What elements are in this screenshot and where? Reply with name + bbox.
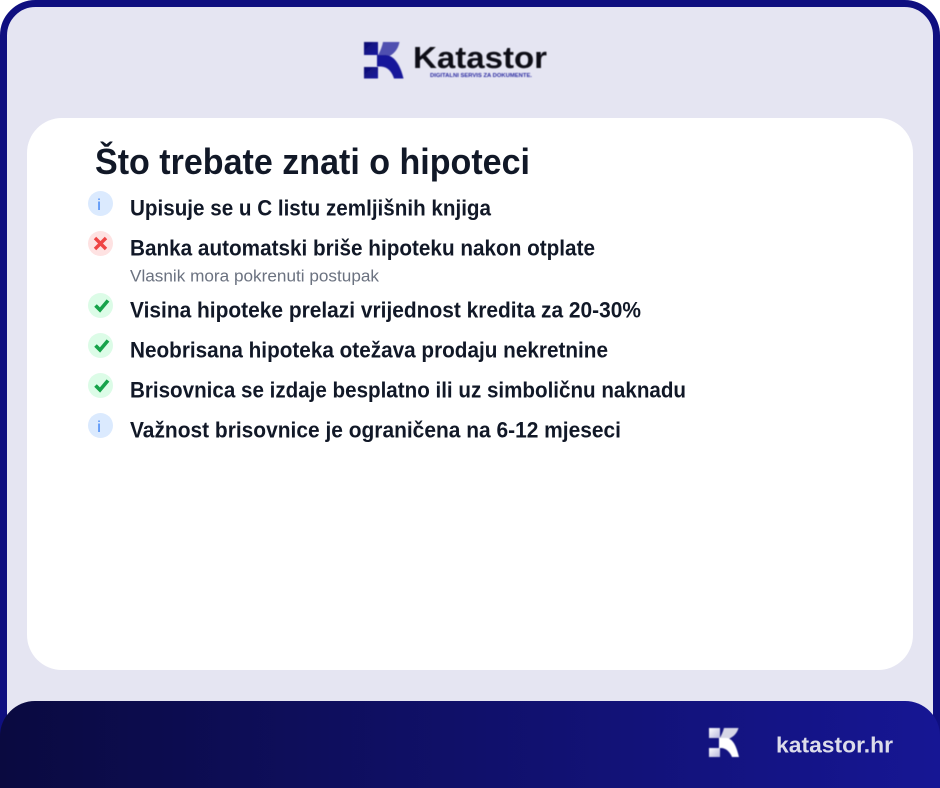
icon: info [88,413,113,438]
list item: check, sale: Neobrisana hipoteka otežava prodaju nekretnine [130,338,608,362]
list item: check, amount: Visina hipoteke prelazi vrijednost kredita za 20-30% [130,298,641,322]
list item: info, C list: Upisuje se u C listu zemljišnih knjiga [130,196,492,220]
icon: check [88,293,113,318]
list item: check, fee: Brisovnica se izdaje besplatno ili uz simboličnu naknadu [130,378,686,402]
panel: white card [27,118,913,670]
logo wordmark: Katastor [413,40,547,75]
icon: logo mark [364,42,404,78]
list item: cross, bank: Banka automatski briše hipoteku nakon otplate [130,236,595,260]
logo tagline: DIGITALNI SERVIS ZA DOKUMENTE. [430,73,533,79]
icon: info: i [97,197,101,214]
footer band [0,701,940,788]
icon: info: i [97,419,101,436]
list item: info, validity: Važnost brisovnice je ograničena na 6-12 mjeseci [130,418,621,442]
icon: footer logo mark [709,728,739,757]
icon: check [88,373,113,398]
icon: check [88,333,113,358]
footer url: katastor.hr [776,732,893,758]
item note: Vlasnik mora pokrenuti postupak [130,268,380,286]
heading: Što trebate znati o hipoteci [95,140,530,182]
icon: cross [88,231,113,256]
icon: info [88,191,113,216]
logo: Katastor [364,40,547,79]
list item: cross, bank [88,231,595,286]
